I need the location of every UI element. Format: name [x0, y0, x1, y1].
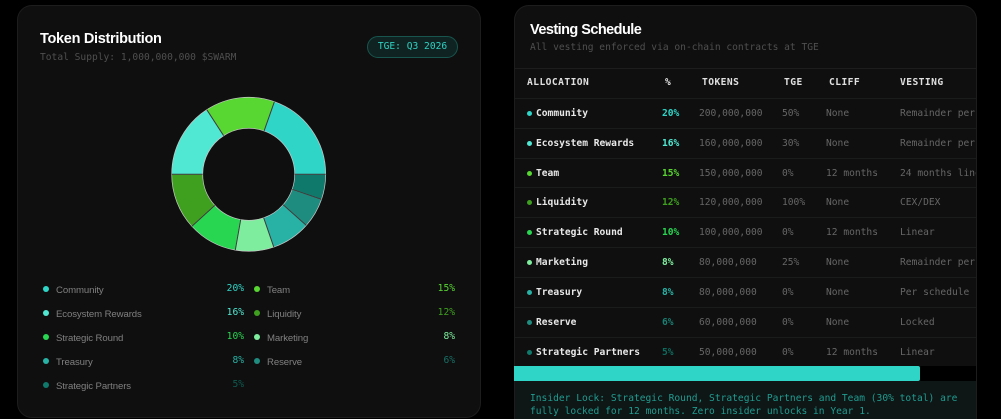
table row: liquidity: CEX/DEX	[900, 197, 940, 208]
table row: community: 20%	[662, 108, 679, 119]
table row: team: 0%	[782, 168, 794, 179]
table header: %	[665, 77, 671, 88]
table row: strategic partners: 12 months	[826, 347, 878, 358]
legend item: reserve	[254, 355, 455, 368]
table header: TOKENS	[702, 77, 739, 88]
table row: strategic partners: 5%	[662, 347, 674, 358]
table row: strategic round: 100,000,000	[699, 227, 763, 238]
table row: treasury: Per schedule	[900, 287, 969, 298]
table row: liquidity: 120,000,000	[699, 197, 763, 208]
subtitle: total supply: Total Supply: 1,000,000,000 $SWARM	[40, 52, 236, 63]
table row: ecosystem rewards	[515, 128, 976, 158]
table row: liquidity: None	[826, 197, 849, 208]
table row: team	[515, 158, 976, 188]
legend	[43, 283, 455, 392]
table row: reserve: 6%	[662, 317, 674, 328]
table header: TGE	[784, 77, 803, 88]
panel: vesting schedule	[514, 5, 977, 419]
table row: marketing: Marketing	[536, 257, 588, 268]
legend item: liquidity	[254, 307, 455, 320]
panel: token distribution	[17, 5, 481, 418]
table row: marketing: 25%	[782, 257, 799, 268]
legend item: liquidity: 12%	[438, 307, 455, 318]
table row: treasury: 80,000,000	[699, 287, 757, 298]
legend item: strategic round	[43, 331, 244, 344]
table row: treasury	[515, 277, 976, 307]
table row: reserve: None	[826, 317, 849, 328]
table row: strategic round: 10%	[662, 227, 679, 238]
donut chart	[171, 96, 326, 252]
table row: reserve: 0%	[782, 317, 794, 328]
table row: marketing	[515, 247, 976, 277]
table row: marketing: 80,000,000	[699, 257, 757, 268]
table row: liquidity	[515, 187, 976, 217]
legend item: marketing: Marketing	[267, 333, 308, 344]
legend item: community: 20%	[227, 283, 244, 294]
table row: team: 15%	[662, 168, 679, 179]
table header: ALLOCATION	[527, 77, 589, 88]
table row: liquidity: 12%	[662, 197, 679, 208]
table row: strategic partners: 50,000,000	[699, 347, 757, 358]
table row: team: 150,000,000	[699, 168, 763, 179]
title: token distribution: Token Distribution	[40, 31, 162, 47]
legend item: marketing: 8%	[443, 331, 455, 342]
legend item: treasury	[43, 355, 244, 368]
badge: TGE date: TGE: Q3 2026	[378, 41, 447, 52]
table row: ecosystem rewards: None	[826, 138, 849, 149]
legend item: strategic round: Strategic Round	[56, 333, 123, 344]
table row: community: 50%	[782, 108, 799, 119]
legend item: community	[43, 283, 244, 296]
table row: reserve: 60,000,000	[699, 317, 757, 328]
callout: insider lock	[515, 381, 976, 419]
legend item: strategic partners: Strategic Partners	[56, 381, 131, 392]
table header: VESTING	[900, 77, 944, 88]
legend item: treasury: 8%	[232, 355, 244, 366]
legend item: marketing	[254, 331, 455, 344]
table row: treasury: 0%	[782, 287, 794, 298]
subtitle: on-chain contracts: All vesting enforced via on-chain contracts at TGE	[530, 42, 819, 53]
legend item: liquidity: Liquidity	[267, 309, 301, 320]
legend item: ecosystem rewards: Ecosystem Rewards	[56, 309, 142, 320]
legend item: ecosystem rewards	[43, 307, 244, 320]
legend item: community: Community	[56, 285, 104, 296]
table header: CLIFF	[829, 77, 860, 88]
table row: strategic partners: Linear	[900, 347, 935, 358]
legend item: reserve: 6%	[443, 355, 455, 366]
table row: treasury: 8%	[662, 287, 674, 298]
table row: marketing: 8%	[662, 257, 674, 268]
table row: community: 200,000,000	[699, 108, 763, 119]
table header	[515, 68, 976, 99]
table row: strategic round: 12 months	[826, 227, 878, 238]
table row: team: 12 months	[826, 168, 878, 179]
legend item: ecosystem rewards: 16%	[227, 307, 244, 318]
table row: community: None	[826, 108, 849, 119]
table row: treasury: None	[826, 287, 849, 298]
table row: liquidity: Liquidity	[536, 197, 588, 208]
table row: ecosystem rewards: 16%	[662, 138, 679, 149]
table row: community	[515, 98, 976, 128]
table row: strategic partners	[515, 337, 976, 367]
table row: treasury: Treasury	[536, 287, 582, 298]
table row: strategic round	[515, 217, 976, 247]
title: vesting schedule: Vesting Schedule	[530, 22, 641, 38]
legend item: treasury: Treasury	[56, 357, 93, 368]
table row: ecosystem rewards: 30%	[782, 138, 799, 149]
legend item: reserve: Reserve	[267, 357, 302, 368]
table row: strategic round: Linear	[900, 227, 935, 238]
table row: strategic partners: Strategic Partners	[536, 347, 640, 358]
table row: reserve: Reserve	[536, 317, 576, 328]
callout: insider lock: fully locked for 12 months. Zero insider unlocks in Year 1.	[530, 406, 871, 417]
table row: community: Community	[536, 108, 588, 119]
legend item: strategic round: 10%	[227, 331, 244, 342]
legend item: team	[254, 283, 455, 296]
table row: team: Team	[536, 168, 559, 179]
badge: TGE date	[367, 36, 458, 58]
table row: reserve	[515, 307, 976, 337]
table row: marketing: None	[826, 257, 849, 268]
legend item: team: 15%	[438, 283, 455, 294]
table row: ecosystem rewards: Ecosystem Rewards	[536, 138, 634, 149]
callout: insider lock: Insider Lock: Strategic Round, Strategic Partners and Team (30% total) are	[530, 393, 957, 404]
table row: reserve: Locked	[900, 317, 935, 328]
table row: strategic round: 0%	[782, 227, 794, 238]
legend item: team: Team	[267, 285, 290, 296]
legend item: strategic partners	[43, 379, 244, 392]
table row: ecosystem rewards: 160,000,000	[699, 138, 763, 149]
table row: strategic round: Strategic Round	[536, 227, 623, 238]
table row: liquidity: 100%	[782, 197, 805, 208]
table row: strategic partners: 0%	[782, 347, 794, 358]
legend item: strategic partners: 5%	[232, 379, 244, 390]
progress bar: insider lock	[514, 366, 976, 381]
